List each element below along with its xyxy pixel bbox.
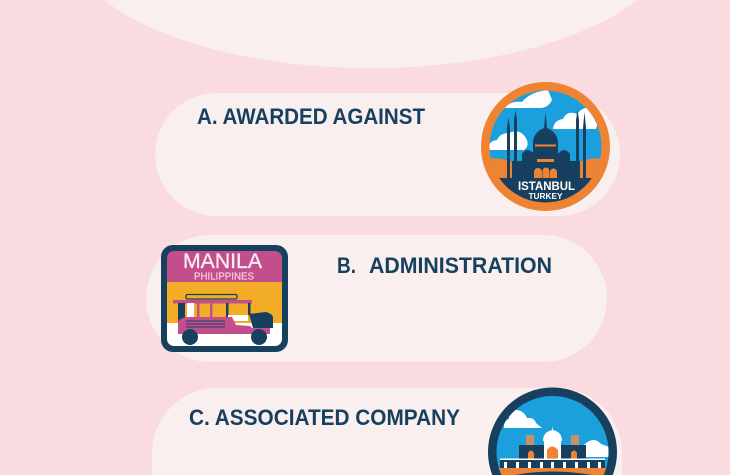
- jeepney: [173, 294, 273, 345]
- heading A: A. AWARDED AGAINST: [197, 104, 426, 129]
- icon: Manila badge: [161, 245, 288, 352]
- panel B: administration: [146, 235, 607, 362]
- panel A: awarded against: [155, 82, 620, 216]
- heading B: ADMINISTRATION: [369, 253, 552, 278]
- heading C: C. ASSOCIATED COMPANY: [189, 405, 460, 430]
- top panel: [104, 0, 637, 68]
- heading B: B.: [337, 253, 356, 278]
- icon: Delhi badge: [488, 388, 620, 475]
- panel C: associated company: [152, 388, 622, 475]
- infographic canvas: [104, 0, 636, 475]
- icon: Manila badge: PHILIPPINES: [194, 272, 254, 282]
- icon: Istanbul badge: TURKEY: [528, 192, 563, 201]
- mosque: [507, 110, 586, 179]
- icon: Manila badge: MANILA: [183, 250, 262, 273]
- palace: [500, 426, 605, 468]
- icon: Istanbul badge: ISTANBUL: [518, 181, 575, 193]
- icon: Istanbul badge: [480, 82, 610, 212]
